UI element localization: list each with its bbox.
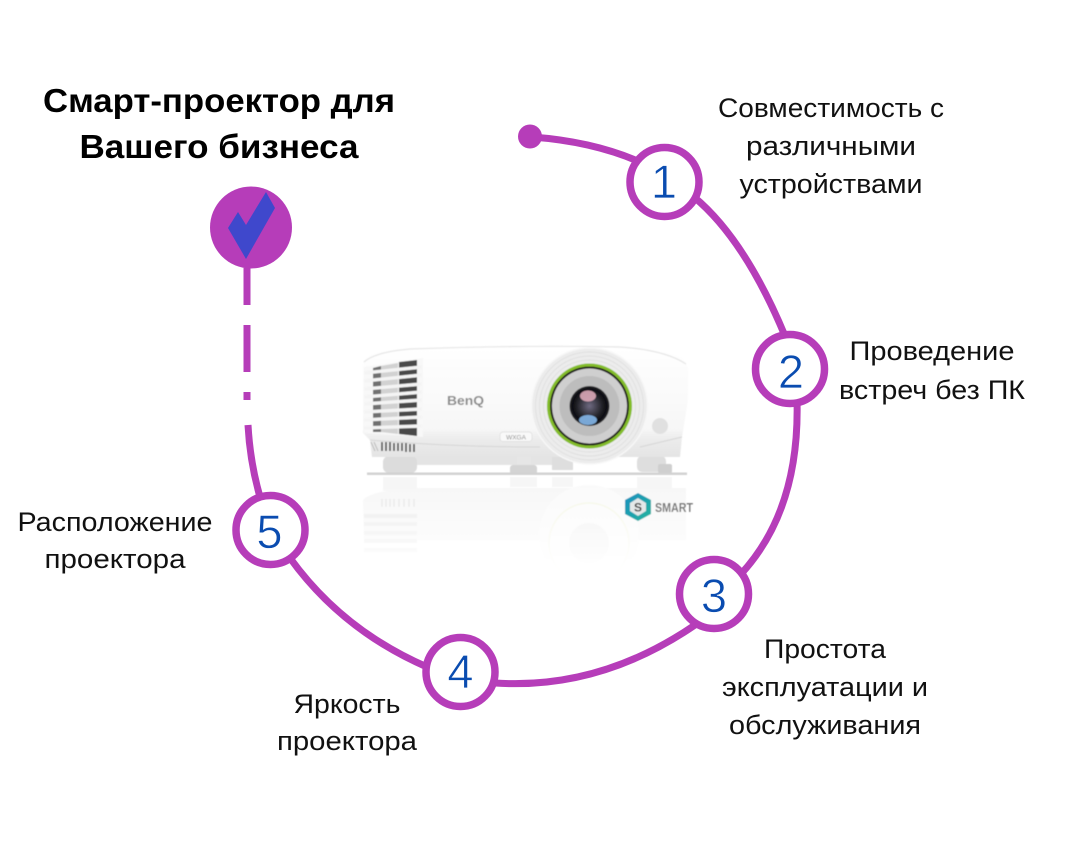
step 5 label: проектора xyxy=(44,544,187,574)
step 4 label: Яркость xyxy=(294,689,400,719)
step 1: 1 xyxy=(651,155,677,208)
WXGA badge: WXGA xyxy=(506,434,527,442)
step 4 label xyxy=(277,689,418,756)
step 1 label: устройствами xyxy=(740,169,922,199)
step 3 label: Простота xyxy=(764,634,887,664)
step 4 xyxy=(426,638,495,706)
projector reflection xyxy=(355,477,695,588)
step 5: 5 xyxy=(256,505,283,558)
step 5 label xyxy=(18,507,212,574)
step 1 label: Совместимость с xyxy=(718,93,944,123)
step 4 label: проектора xyxy=(277,726,418,756)
step 5 label: Расположение xyxy=(18,507,212,537)
step 3: 3 xyxy=(701,569,727,622)
projector feet xyxy=(383,453,672,475)
projector vents xyxy=(364,358,423,452)
step 3 label xyxy=(722,634,928,740)
title xyxy=(43,82,395,165)
step 3 label: обслуживания xyxy=(729,710,921,740)
sensor button xyxy=(652,418,668,434)
step 1 label: различными xyxy=(746,131,916,161)
projector body xyxy=(363,344,688,457)
step 1 xyxy=(630,148,699,216)
brand logo: BenQ xyxy=(447,393,484,408)
step 2: 2 xyxy=(778,345,804,398)
smart logo xyxy=(625,493,693,521)
WXGA badge xyxy=(500,432,532,442)
step 1 label xyxy=(718,93,944,199)
projector xyxy=(355,344,695,588)
smart logo: S xyxy=(634,500,642,514)
smart logo: SMART xyxy=(655,500,693,515)
icon: check badge xyxy=(210,186,292,268)
title: Смарт-проектор для xyxy=(43,82,395,119)
step 3 xyxy=(680,560,748,628)
step 2 label: встреч без ПК xyxy=(839,375,1025,405)
timeline arc xyxy=(247,137,797,684)
lens assembly xyxy=(532,348,648,464)
step 4: 4 xyxy=(447,645,474,698)
projector shadow line xyxy=(367,472,687,475)
step 2 xyxy=(756,334,824,404)
step 3 label: эксплуатации и xyxy=(722,672,928,702)
step 2 label xyxy=(839,336,1025,405)
title: Вашего бизнеса xyxy=(80,128,359,165)
step 5 xyxy=(236,496,305,564)
start dot xyxy=(518,124,542,148)
step 2 label: Проведение xyxy=(850,336,1014,366)
